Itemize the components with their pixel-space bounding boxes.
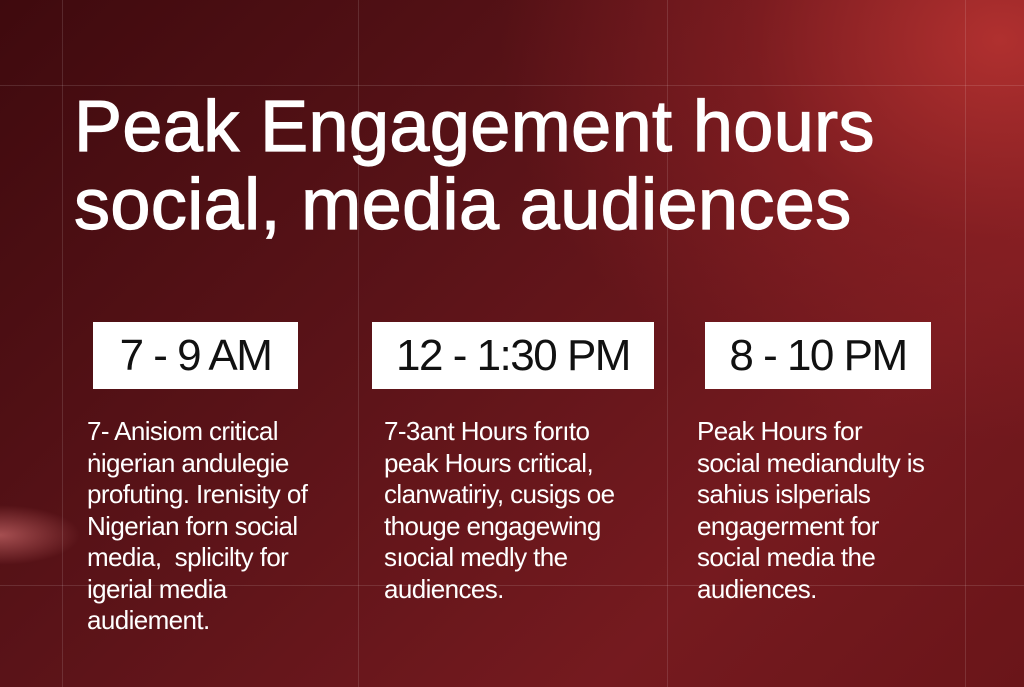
text: evening: sahius islperials [697, 479, 870, 509]
text: midday: sıocial medly the [384, 542, 567, 572]
time box: midday [372, 322, 654, 389]
title: Peak Engagement hours [74, 87, 875, 167]
text: evening: engagerment for [697, 510, 879, 540]
text: morning: profuting. Irenisity of [87, 479, 307, 509]
title: social, media audiences [74, 165, 852, 245]
text: midday [384, 416, 615, 604]
title [74, 87, 875, 245]
time box: midday: 12 - 1:30 PM [396, 331, 630, 380]
text: morning [87, 416, 308, 635]
text: morning: 7- Anisiom critical [87, 416, 278, 446]
text: evening [697, 416, 924, 604]
time box: morning: 7 - 9 AM [120, 331, 271, 380]
text: midday: clanwatiriy, cusigs oe [384, 479, 615, 509]
text: midday: peak Hours critical, [384, 448, 593, 478]
text: midday: thouge engagewing [384, 510, 601, 540]
time box: morning [93, 322, 298, 389]
text: morning: Nigerian forn social [87, 510, 298, 540]
text: midday: 7-3ant Hours forıto [384, 416, 589, 446]
text: evening: social media the [697, 542, 875, 572]
text: evening: Peak Hours for [697, 416, 862, 446]
text: morning: audiement. [87, 605, 210, 635]
time box: evening [705, 322, 931, 389]
time box: evening: 8 - 10 PM [729, 331, 907, 380]
text: morning: media, splicilty for [87, 542, 288, 572]
text: evening: social mediandulty is [697, 448, 924, 478]
text: morning: igerial media [87, 574, 227, 604]
text: midday: audiences. [384, 574, 504, 604]
text: evening: audiences. [697, 574, 817, 604]
text: morning: ṅigerian andulegie [87, 448, 289, 478]
